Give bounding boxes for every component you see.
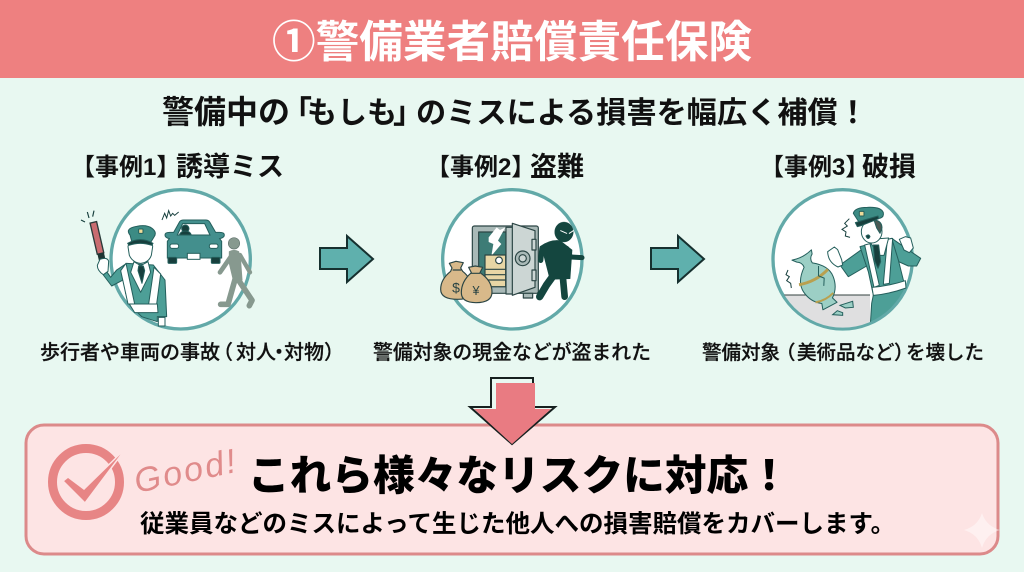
down arrow <box>470 378 555 444</box>
icon: pedestrian <box>220 238 252 306</box>
icon: guard and broken vase <box>770 190 921 332</box>
case 3 caption: 警備対象 <box>702 342 780 364</box>
case 3 caption: 美術品など <box>797 342 895 364</box>
case 1 caption: ・ <box>269 342 289 364</box>
subtitle: もしも <box>307 97 397 130</box>
case 1 caption: 対物 <box>284 341 324 364</box>
sparkle <box>964 513 1000 548</box>
icon: guard directing car and pedestrian <box>81 190 252 329</box>
subtitle: 」 <box>393 95 424 130</box>
case 3 heading: 【事例3】 <box>760 154 869 181</box>
case 1 heading <box>71 152 284 182</box>
icon: shocked guard <box>828 207 921 330</box>
vase shards <box>833 301 853 315</box>
case 2 heading <box>426 152 584 182</box>
arrow 1 <box>320 236 373 282</box>
icon: check mark <box>52 447 127 516</box>
case 3 caption: を壊した <box>906 342 984 364</box>
icon: vase <box>787 247 845 314</box>
case 3 caption: （ <box>776 342 796 364</box>
icon: car <box>165 220 224 263</box>
arrow 2 <box>651 236 704 282</box>
Good handwritten note: Good! <box>131 442 241 501</box>
header band <box>0 0 1024 78</box>
subtitle: 警備中の <box>162 94 290 130</box>
case 3 heading: 破損 <box>862 152 916 182</box>
icon: money bags <box>441 261 492 303</box>
case 1 column <box>40 152 344 364</box>
main message: これら様々なリスクに対応！ <box>248 452 790 499</box>
case 3 column <box>702 152 984 364</box>
squiggles <box>786 219 850 288</box>
case 3 heading <box>760 152 916 182</box>
icon: safe <box>472 223 538 298</box>
icon: baton <box>81 211 106 263</box>
result panel <box>26 425 998 554</box>
case 3 caption: ） <box>894 342 914 364</box>
case 2 heading: 盗難 <box>530 152 584 182</box>
supporting message: 従業員などのミスによって生じた他人への損害賠償をカバーします。 <box>140 510 895 538</box>
case 1 caption: 対人 <box>236 341 276 364</box>
icon: thief <box>540 222 582 297</box>
squiggle <box>162 211 179 220</box>
case 1 caption: （ <box>213 341 233 364</box>
subtitle: のミスによる損害を幅広く補償！ <box>416 96 868 130</box>
title: ①警備業者賠償責任保険 <box>272 18 752 67</box>
subtitle: 「 <box>281 95 312 130</box>
case 2 heading: 【事例2】 <box>426 154 535 181</box>
icon: thief and safe <box>441 190 582 329</box>
case 2 caption: 警備対象の現金などが盗まれた <box>373 341 651 364</box>
case 2 column <box>373 152 651 364</box>
case 1 heading: 誘導ミス <box>176 152 284 182</box>
icon: thief and safe: $ <box>452 280 460 296</box>
table <box>784 294 870 328</box>
case 1 caption: 歩行者や車両の事故 <box>40 341 220 364</box>
icon: guard <box>97 226 167 326</box>
case 1 heading: 【事例1】 <box>71 154 180 181</box>
case 1 caption: ） <box>324 341 344 364</box>
icon: thief and safe: ¥ <box>471 284 480 298</box>
